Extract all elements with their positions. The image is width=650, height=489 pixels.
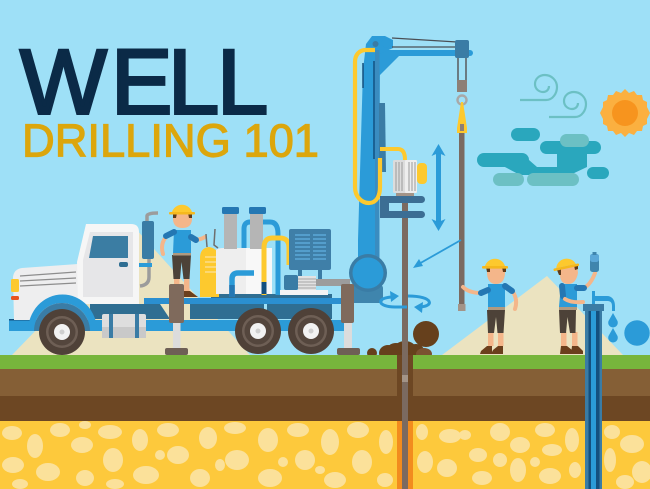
radiator panel — [289, 229, 331, 270]
rotation arrow — [381, 291, 429, 313]
worker at tap — [552, 252, 599, 354]
sun — [600, 89, 650, 137]
helmet — [169, 205, 195, 214]
legs and boots — [480, 307, 505, 354]
wheel arch shadow — [34, 303, 90, 331]
sand pebbles — [2, 421, 650, 489]
title: WELL — [20, 32, 268, 134]
head — [558, 264, 578, 284]
hood grille — [20, 272, 76, 286]
drill head arms — [380, 196, 425, 218]
diagonal arrow — [413, 240, 461, 268]
exhaust stack — [139, 213, 158, 286]
raised arm — [584, 273, 595, 288]
sand pile left — [12, 228, 250, 355]
legs and boots — [172, 253, 198, 297]
title: DRILLING 101 — [22, 114, 319, 166]
arms — [162, 237, 205, 254]
white tank — [205, 248, 272, 294]
arms — [463, 287, 516, 309]
gray stacks — [222, 207, 278, 295]
yellow hydraulic hose — [355, 50, 405, 203]
control levers — [206, 229, 218, 248]
truck flatbed and frame — [9, 294, 345, 331]
head — [487, 267, 505, 284]
shirt — [559, 284, 577, 307]
pump motor — [280, 270, 350, 295]
front wheel — [39, 309, 85, 355]
truck hood — [13, 264, 78, 320]
shirt — [488, 284, 505, 307]
title — [20, 32, 319, 166]
sleeves — [481, 286, 512, 293]
rear outrigger — [337, 284, 360, 355]
crane — [349, 36, 473, 303]
truck — [9, 213, 345, 355]
dirt mound — [367, 321, 439, 361]
vertical double arrow — [432, 144, 446, 231]
hair — [557, 264, 578, 275]
yellow tank — [200, 247, 219, 297]
shirt — [173, 230, 191, 253]
borehole — [397, 355, 413, 489]
water well pipe — [583, 304, 604, 489]
legs and boots — [559, 307, 583, 354]
helmet — [552, 256, 579, 271]
hoist cable and hook — [457, 58, 467, 133]
sand pile right — [442, 276, 623, 355]
blue and yellow pipes — [232, 238, 289, 297]
drill head motor — [393, 160, 427, 196]
front wheel arch — [28, 294, 97, 331]
truck cab — [77, 224, 139, 304]
faucet and water drops — [592, 291, 650, 346]
forearm — [565, 299, 583, 302]
headlight — [11, 279, 19, 292]
clouds — [477, 128, 609, 186]
sleeves — [562, 286, 584, 296]
helmet — [482, 259, 508, 269]
worker by drill pipe — [463, 259, 516, 354]
front outrigger — [165, 284, 188, 355]
hair — [173, 213, 192, 218]
middle wheel — [235, 308, 281, 354]
rear wheel — [288, 308, 334, 354]
water sample bottle — [590, 252, 599, 272]
drill rod — [402, 200, 408, 489]
fuel tank — [102, 314, 146, 338]
hanging drill pipe — [458, 133, 466, 311]
worker on truck — [162, 205, 218, 297]
indicator light — [11, 296, 19, 300]
head — [173, 213, 192, 228]
sleeves — [166, 232, 196, 240]
ground layers — [0, 355, 650, 489]
hair — [486, 267, 506, 272]
wind swirls — [520, 75, 586, 117]
